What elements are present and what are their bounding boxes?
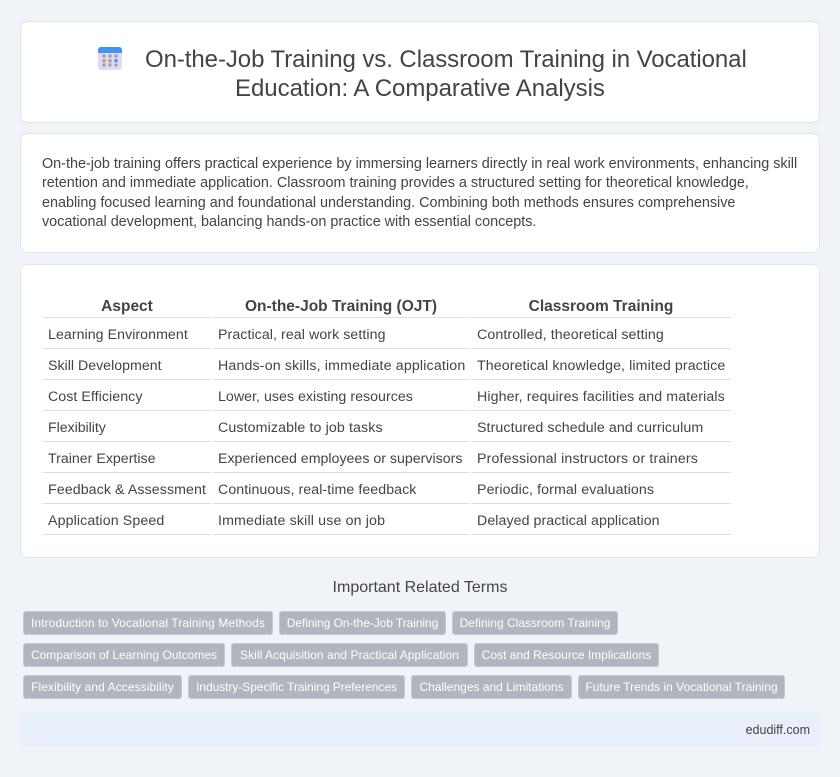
panel: comparison table card: [20, 264, 820, 558]
table header row: Classroom Training: [529, 298, 673, 315]
summary text: On-the-job training offers practical experience by immersing learners directly in real work environments, enhancing skill: [42, 156, 797, 172]
related terms tags: [23, 611, 785, 699]
row: learning environment: Learning Environment: [48, 327, 188, 343]
footer brand: edudiff.com: [746, 723, 810, 737]
tag row 2: Skill Acquisition and Practical Application: [240, 648, 459, 662]
row: trainer expertise: Experienced employees or supervisors: [218, 451, 462, 467]
title: [145, 46, 747, 102]
footer bar: [20, 713, 820, 747]
row: application speed: Application Speed: [48, 513, 164, 529]
row: cost efficiency: Higher, requires facilities and materials: [477, 389, 725, 405]
tag row 2: Comparison of Learning Outcomes: [31, 648, 217, 662]
tag row 3: Challenges and Limitations: [419, 680, 564, 694]
summary text: vocational development, balancing hands-on practice with essential concepts.: [42, 214, 536, 230]
tag row 3: [23, 675, 785, 699]
row: skill development: Theoretical knowledge, limited practice: [477, 358, 725, 374]
table header row: Aspect: [101, 298, 153, 315]
summary text: enabling focused learning and foundational understanding. Combining both methods ensures comprehensive: [42, 195, 735, 211]
row: feedback and assessment: [43, 482, 731, 504]
tag row 3: Flexibility and Accessibility: [31, 680, 174, 694]
row: trainer expertise: Trainer Expertise: [48, 451, 156, 467]
summary text: [42, 156, 797, 230]
panel: summary card: [20, 133, 820, 253]
comparison table: [43, 298, 731, 535]
tag row 2: [23, 643, 659, 667]
tag row 1: [23, 611, 618, 635]
row: trainer expertise: [43, 451, 731, 473]
tag row 1: Defining Classroom Training: [460, 616, 610, 630]
row: cost efficiency: Cost Efficiency: [48, 389, 142, 405]
row: flexibility: [43, 420, 731, 442]
row: feedback and assessment: Periodic, formal evaluations: [477, 482, 654, 498]
title: Education: A Comparative Analysis: [235, 75, 605, 102]
row: application speed: [43, 513, 731, 535]
row: flexibility: Structured schedule and curriculum: [477, 420, 703, 436]
row: learning environment: Practical, real work setting: [218, 327, 386, 343]
row: application speed: Immediate skill use on job: [218, 513, 385, 529]
tag row 3: Future Trends in Vocational Training: [585, 680, 778, 694]
row: learning environment: Controlled, theoretical setting: [477, 327, 664, 343]
row: cost efficiency: Lower, uses existing resources: [218, 389, 413, 405]
tag row 2: Cost and Resource Implications: [482, 648, 651, 662]
row: learning environment: [43, 327, 731, 349]
title: On-the-Job Training vs. Classroom Training in Vocational: [145, 46, 747, 73]
tag row 3: Industry-Specific Training Preferences: [196, 680, 397, 694]
row: cost efficiency: [43, 389, 731, 411]
row: flexibility: Flexibility: [48, 420, 106, 436]
row: skill development: Hands-on skills, immediate application: [218, 358, 465, 374]
row: skill development: [43, 358, 731, 380]
row: trainer expertise: Professional instructors or trainers: [477, 451, 698, 467]
icon: calendar: [98, 47, 122, 70]
table header row: [43, 298, 731, 318]
table header row: On-the-Job Training (OJT): [245, 298, 437, 315]
related terms heading: Important Related Terms: [333, 579, 507, 596]
row: flexibility: Customizable to job tasks: [218, 420, 383, 436]
panel: title card: [20, 21, 820, 123]
row: feedback and assessment: Continuous, real-time feedback: [218, 482, 416, 498]
row: skill development: Skill Development: [48, 358, 162, 374]
summary text: retention and immediate application. Classroom training provides a structured setting for theoretical knowledge,: [42, 175, 749, 191]
row: application speed: Delayed practical application: [477, 513, 660, 529]
tag row 1: Defining On-the-Job Training: [287, 616, 438, 630]
tag row 1: Introduction to Vocational Training Methods: [31, 616, 265, 630]
row: feedback and assessment: Feedback & Assessment: [48, 482, 206, 498]
